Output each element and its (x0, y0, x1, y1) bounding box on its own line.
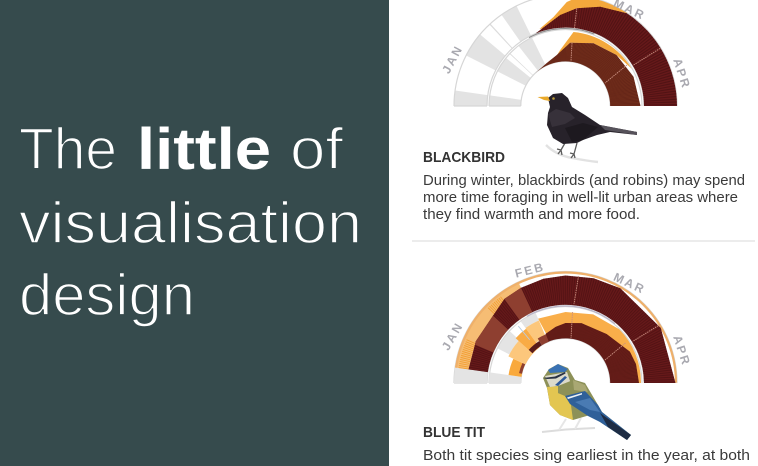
icon: blackbird (538, 93, 637, 162)
left title panel (0, 0, 389, 466)
title (19, 117, 362, 328)
heading: blue tit: BLUE TIT (423, 424, 485, 441)
chart: blue tit song arcs (454, 272, 677, 383)
icon: blue tit (542, 364, 631, 440)
label: JAN: JAN (439, 42, 466, 76)
chart: blackbird song arcs (454, 0, 677, 106)
title: visualisation (19, 191, 362, 256)
label: MAR: MAR (611, 270, 648, 297)
label: APR: APR (670, 333, 693, 368)
text: blue tit description: Both tit species sing earliest in the year, at both (423, 448, 750, 464)
title: The (19, 117, 117, 182)
text: blackbird description (423, 173, 745, 223)
title: design (19, 263, 195, 328)
label: FEB: FEB (513, 260, 547, 281)
heading: blackbird: BLACKBIRD (423, 149, 505, 166)
panel: blue tit (423, 260, 750, 464)
text: blackbird description: more time foraging in well-lit urban areas where (423, 190, 738, 206)
title: little (137, 117, 271, 182)
label: JAN: JAN (439, 319, 466, 353)
panel: blackbird (423, 0, 745, 223)
text: blackbird description: they find warmth and more food. (423, 207, 640, 223)
label: APR: APR (670, 56, 693, 91)
title: of (290, 117, 344, 182)
text: blackbird description: During winter, blackbirds (and robins) may spend (423, 173, 745, 189)
